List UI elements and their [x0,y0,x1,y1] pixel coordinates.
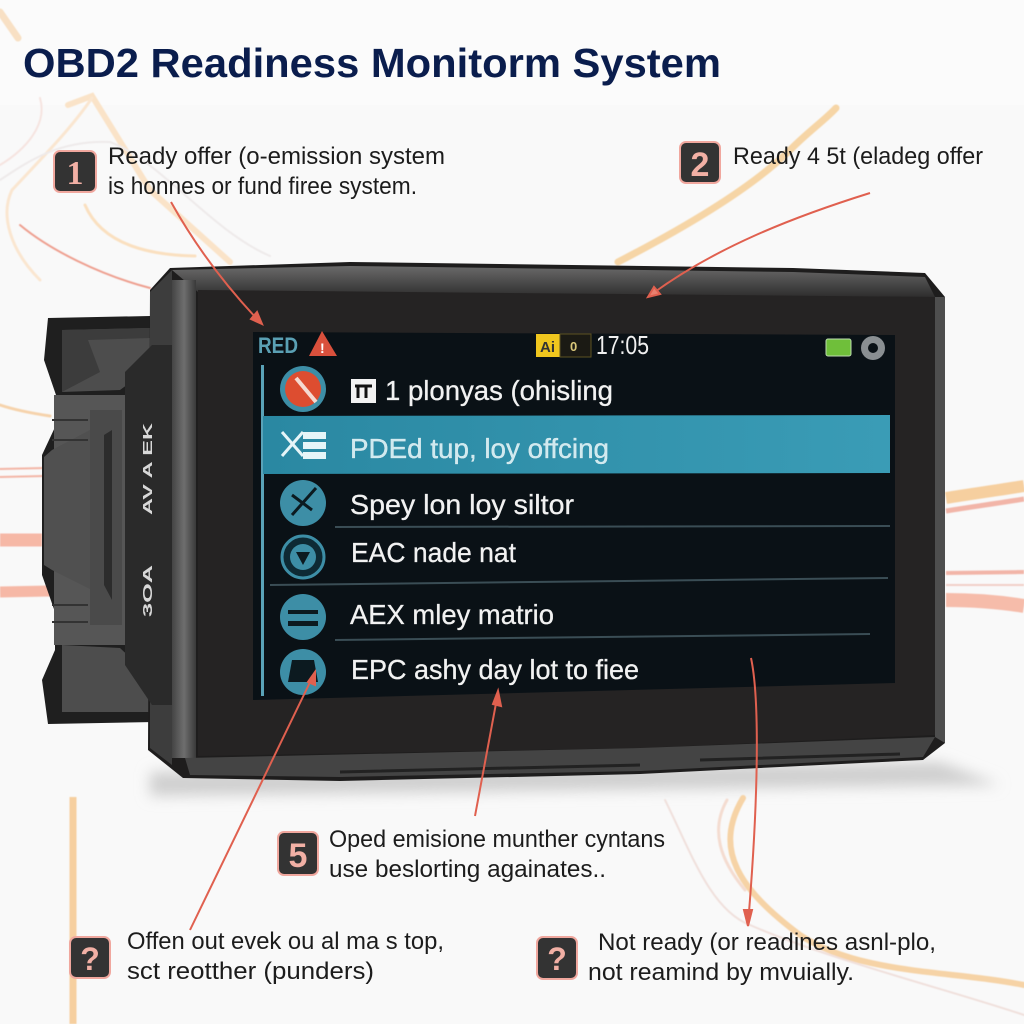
row labels: EPC ashy day lot to fiee [351,654,639,685]
callout bottom left [70,928,444,985]
status bar: ! [320,340,325,356]
status bar: RED [258,333,298,358]
row icons [280,366,326,695]
callout bottom right [537,929,936,986]
row labels: EAC nade nat [351,537,516,568]
leader arrows [171,193,870,930]
row labels: PDEd tup, loy offcing [350,433,609,464]
callout bottom left: Offen out evek ou al ma s top, [127,928,444,955]
arrow 5 [475,691,501,816]
screen [253,330,895,700]
status bar [258,330,885,360]
callout bottom right: not reamind by mvuially. [588,959,854,986]
side port labels: 3OA [140,564,155,617]
status bar: Ai [540,339,555,356]
status bar: 0 [570,339,577,354]
side port labels [140,422,155,617]
callout 1: 1 [66,155,84,192]
callout 1 [54,143,445,200]
callout bottom right: Not ready (or readines asnl-plo, [598,929,936,956]
row labels: 1 plonyas (ohisling [385,375,613,406]
arrow 2 [648,193,870,297]
callout bottom left: ? [80,941,100,977]
title: OBD2 Readiness Monitorm System [23,40,721,86]
callout 2: Ready 4 5t (eladeg offer [733,143,983,170]
callout 5: 5 [289,837,307,875]
arrow bottom right [744,658,757,926]
row labels [350,375,639,685]
row labels: AEX mley matrio [350,599,554,630]
side port labels: AV A EK [140,422,155,515]
callout 1: is honnes or fund firee system. [108,173,417,200]
callout bottom left: sct reotther (punders) [127,958,374,985]
row icon: box glyph [351,379,376,403]
callout 2: 2 [691,146,709,184]
row dividers [270,526,890,640]
device body [125,262,945,781]
arrow bottom left [190,672,315,930]
arrow 1 [171,202,262,324]
callout 2 [680,142,983,184]
callout 5: Oped emisione munther cyntans [329,826,665,853]
callout bottom right: ? [547,941,567,977]
row labels: Spey lon loy siltor [350,489,574,520]
status bar: 17:05 [596,330,649,360]
left rail [261,365,264,696]
callout 1: Ready offer (o-emission system [108,143,445,170]
connector [42,316,155,724]
callout 5: use beslorting againates.. [329,856,606,883]
highlighted row [263,415,890,474]
callout 5 [278,826,665,883]
